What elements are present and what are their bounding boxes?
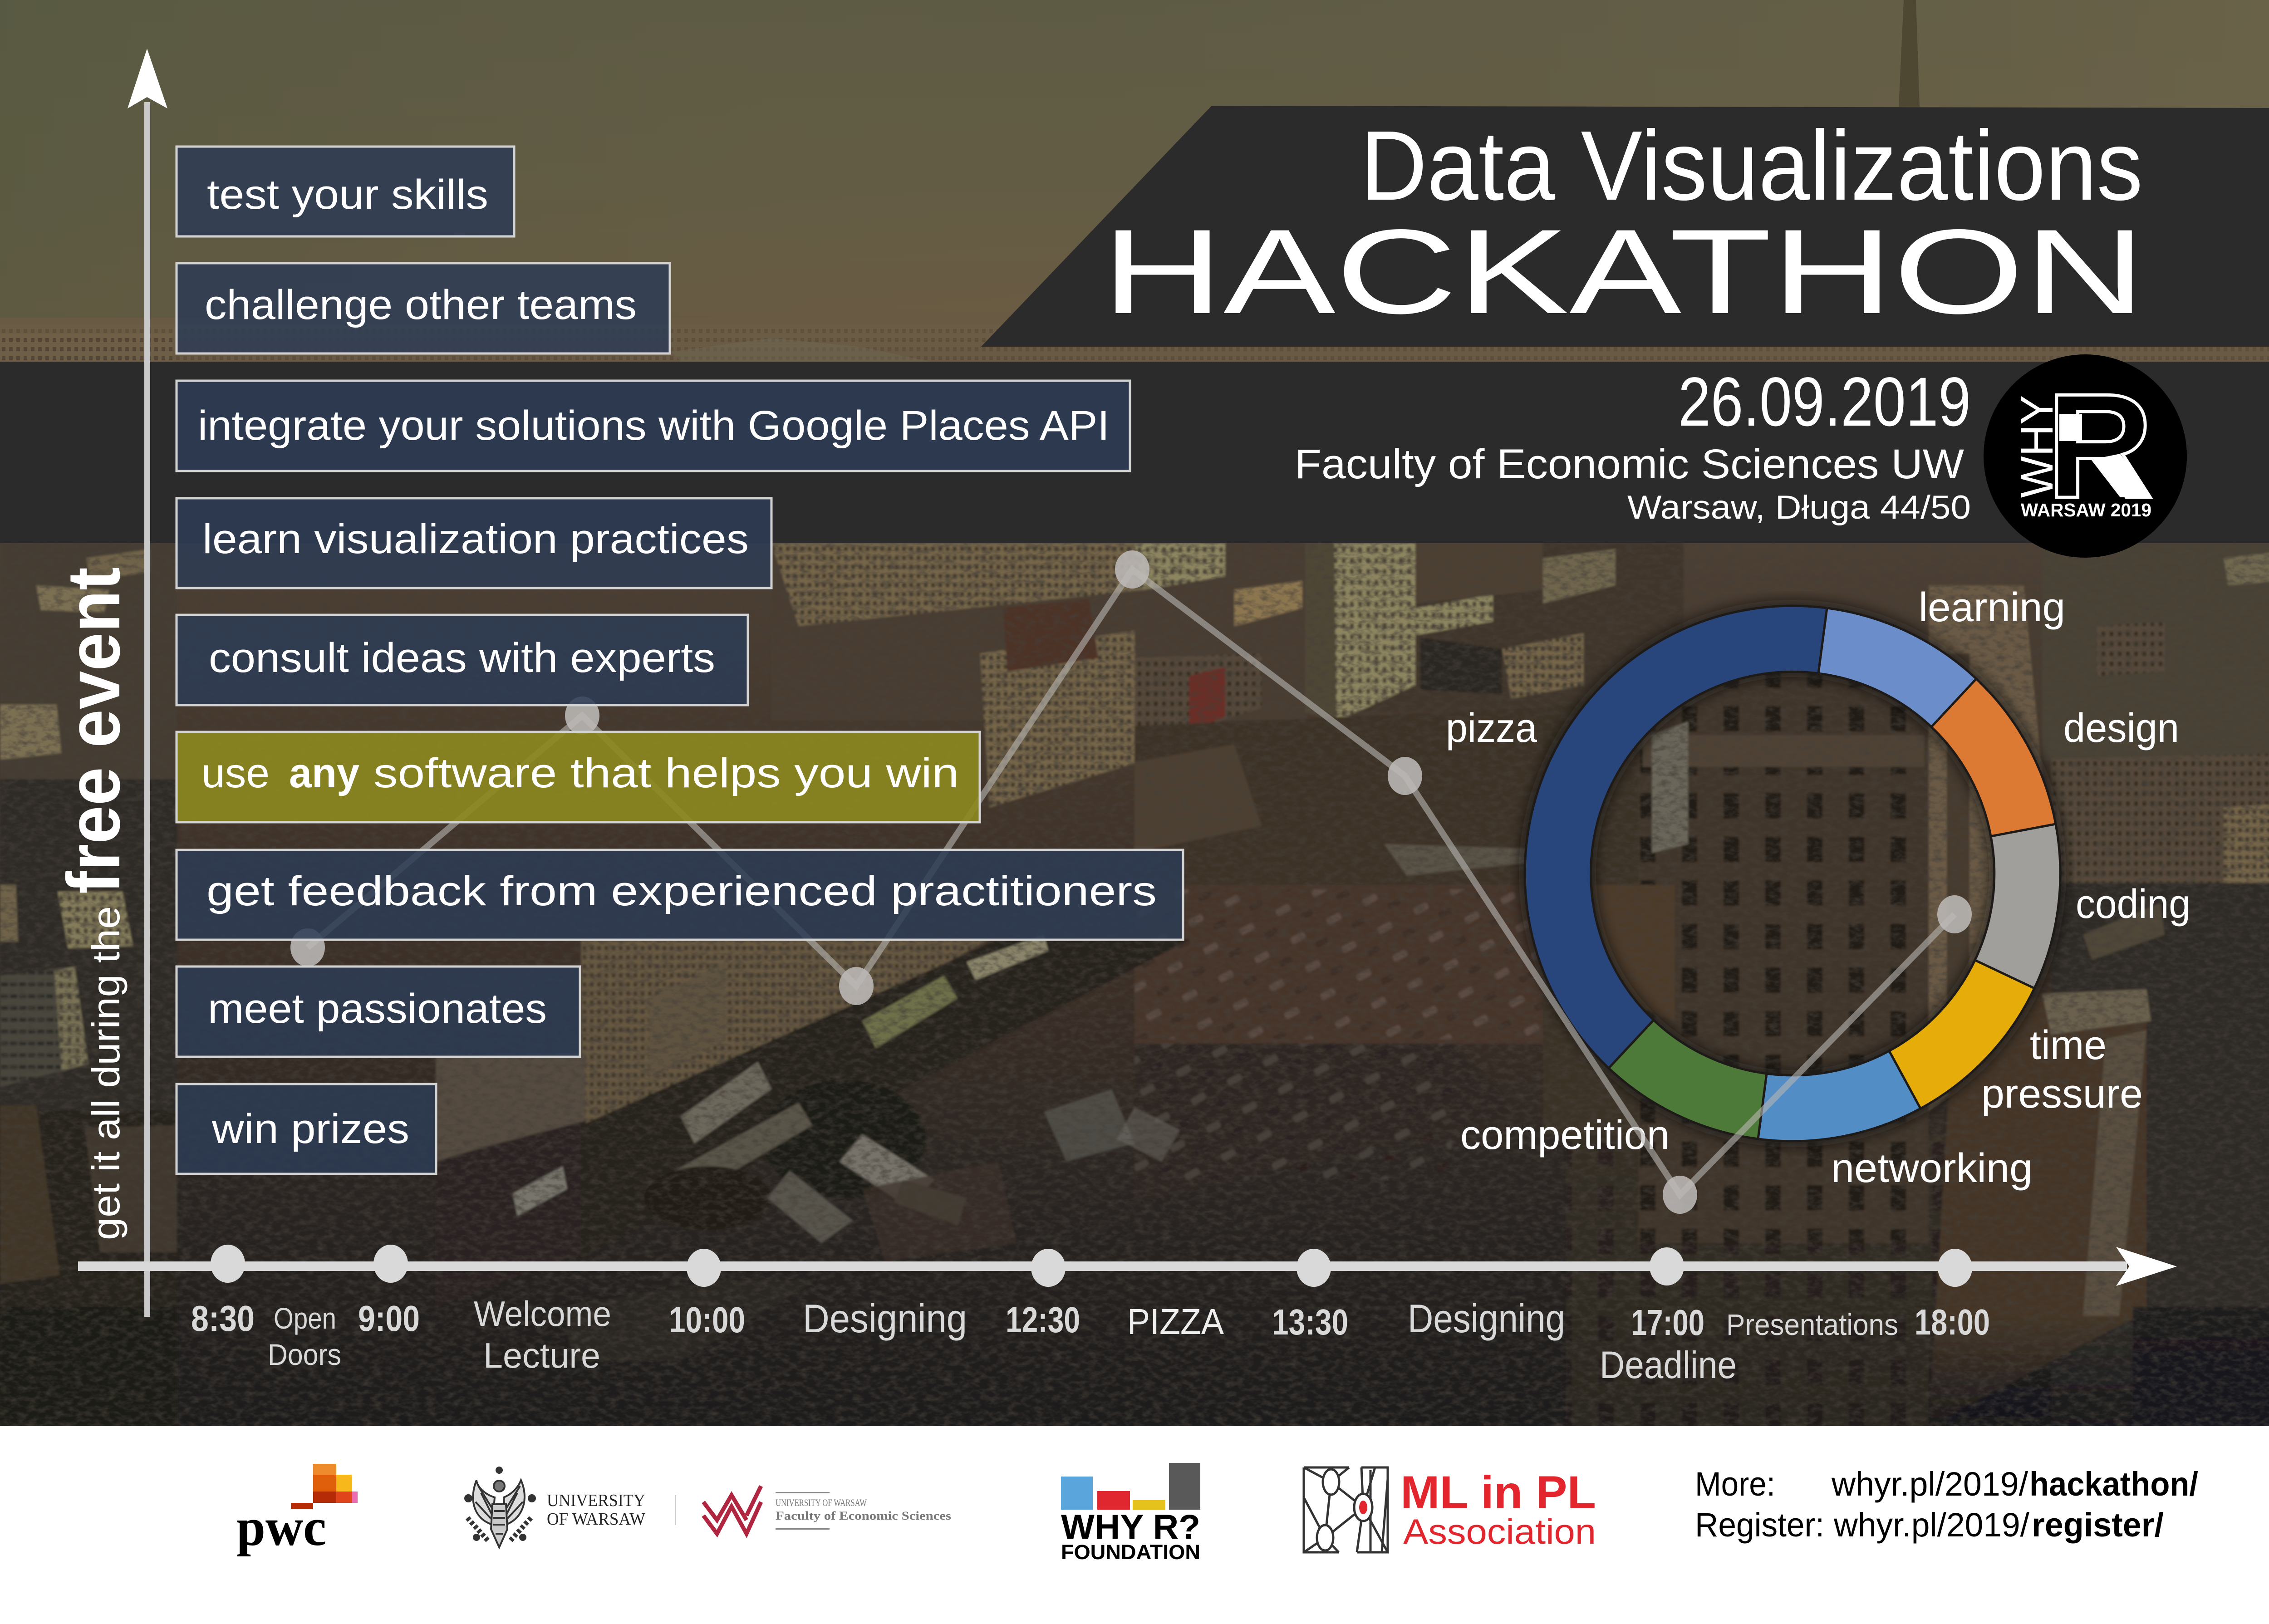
white footer	[0, 1426, 2269, 1624]
box: consult ideas with experts: consult ideas with experts	[209, 635, 715, 681]
box: test your skills: test your skills	[207, 172, 488, 218]
timeline labels: Designing	[1408, 1296, 1565, 1341]
donut labels: coding	[2076, 882, 2190, 927]
box: win prizes: win prizes	[211, 1106, 409, 1152]
box: meet passionates: meet passionates	[208, 986, 547, 1032]
box: use any software (highlighted)	[177, 732, 980, 822]
coaches parked on the square	[840, 1134, 935, 1207]
event date and venue: Faculty of Economic Sciences UW	[1295, 441, 1964, 487]
box: test your skills	[177, 147, 514, 236]
title: HACKATHON: HACKATHON	[1102, 205, 2146, 339]
event date and venue: 26.09.2019	[1678, 363, 1971, 441]
underpass and circular lawns	[762, 1080, 926, 1198]
timeline labels: Welcome	[474, 1294, 611, 1334]
logo: ML in PL Association: Association	[1403, 1511, 1596, 1551]
links: more and register: register/	[2032, 1506, 2164, 1544]
box: learn visualization practices: learn visualization practices	[202, 516, 749, 562]
rotated axis label	[52, 567, 135, 1240]
segment: networking	[1758, 1051, 1920, 1141]
timeline labels: Designing	[803, 1296, 967, 1341]
logo: ML in PL Association	[1304, 1467, 1596, 1552]
event date and venue	[1295, 363, 1971, 526]
central district blocks	[436, 543, 1684, 1361]
donut labels: learning	[1919, 585, 2065, 630]
logo: ML in PL Association: ML in PL	[1400, 1467, 1596, 1518]
segment: competition	[1609, 1020, 1767, 1139]
timeline axis with markers and arrow	[78, 1245, 2177, 1287]
timeline labels: Deadline	[1600, 1344, 1737, 1386]
dark title banner	[981, 106, 2269, 347]
logo: Why R? Foundation	[1061, 1463, 1200, 1564]
timeline labels: PIZZA	[1127, 1301, 1224, 1342]
logo: PwC	[236, 1464, 358, 1557]
segment: pizza	[1525, 606, 1827, 1068]
icon: eagle crest	[465, 1467, 535, 1547]
logo: Faculty of Economic Sciences: Faculty of Economic Sciences	[776, 1509, 951, 1522]
logo: University of Warsaw: UNIVERSITY	[547, 1491, 645, 1510]
title: Data Visualizations: Data Visualizations	[1360, 111, 2143, 221]
donut labels: pizza	[1446, 706, 1537, 751]
timeline labels: Presentations	[1726, 1308, 1898, 1341]
logo: Faculty of Economic Sciences: UNIVERSITY OF WARSAW	[776, 1497, 867, 1508]
horizon city strip	[0, 324, 2269, 362]
eastern district blocks	[1929, 543, 2269, 1426]
timeline labels: Open	[274, 1301, 336, 1335]
links: more and register	[1695, 1465, 2198, 1544]
logo: PwC: pwc	[236, 1497, 326, 1557]
logo: Why R? Foundation: FOUNDATION	[1061, 1541, 1200, 1564]
links: more and register: Register:	[1695, 1506, 1824, 1544]
logo separator	[675, 1495, 676, 1525]
logo: Why R? Warsaw 2019	[1984, 354, 2187, 558]
box: get feedback	[177, 850, 1183, 940]
line chart: excitement over the day	[290, 550, 1972, 1214]
rotated axis label: get it all during the	[85, 906, 128, 1240]
donut labels: networking	[1831, 1146, 2033, 1191]
Palace of Culture tower	[1543, 585, 2042, 1426]
timeline labels: Doors	[268, 1338, 341, 1371]
box: consult ideas with experts	[177, 615, 748, 705]
shopping mall and street	[581, 940, 989, 1125]
logo: University of Warsaw	[465, 1467, 645, 1547]
event date and venue: Warsaw, Długa 44/50	[1627, 489, 1971, 526]
donut labels	[1446, 585, 2190, 1191]
icon: ML in PL network	[1304, 1467, 1388, 1552]
logo: Why R? Warsaw 2019: R	[2047, 363, 2153, 529]
box: use any software (highlighted): software that helps you win	[373, 750, 959, 796]
timeline labels: Lecture	[483, 1335, 600, 1375]
box: integrate with Google Places API	[177, 381, 1130, 471]
segment: coding	[1975, 824, 2060, 988]
box: use any software (highlighted): use	[201, 750, 270, 796]
left district blocks	[0, 543, 177, 1426]
donut labels: time	[2030, 1023, 2107, 1068]
box: use any software (highlighted): any	[289, 750, 359, 796]
timeline labels: 13:30	[1272, 1302, 1348, 1342]
segment: time pressure	[1889, 960, 2034, 1109]
logo: Why R? Foundation: WHY R?	[1061, 1508, 1200, 1546]
box: challenge other teams	[177, 263, 670, 353]
links: more and register: whyr.pl/2019/	[1831, 1465, 2028, 1503]
donut labels: design	[2063, 706, 2179, 751]
radio mast on the horizon	[1899, 0, 1920, 107]
rotated axis label: free event	[52, 567, 135, 894]
donut chart: share of activities	[1525, 606, 2060, 1141]
box: win prizes	[177, 1084, 436, 1174]
timeline labels: 8:30	[191, 1298, 255, 1339]
timeline labels: 9:00	[358, 1298, 420, 1339]
box: meet passionates	[177, 967, 580, 1057]
donut labels: competition	[1460, 1113, 1670, 1158]
dark horizontal date band	[0, 362, 2269, 543]
links: more and register: More:	[1695, 1465, 1775, 1503]
plaza and car park ground	[1134, 708, 1552, 908]
hotel tower	[1305, 543, 1336, 721]
timeline labels	[191, 1294, 1990, 1386]
vertical axis with arrow	[128, 49, 167, 1317]
segment: learning	[1818, 608, 1976, 727]
timeline labels: 12:30	[1006, 1300, 1080, 1340]
logo: Faculty of Economic Sciences	[703, 1486, 951, 1534]
timeline labels: 18:00	[1915, 1302, 1990, 1342]
logo: Why R? Warsaw 2019: WHY	[2012, 395, 2063, 498]
timeline labels: 10:00	[669, 1300, 745, 1340]
box: challenge other teams: challenge other teams	[205, 282, 637, 328]
box: get feedback: get feedback from experienced practitioners	[206, 868, 1157, 914]
segment: design	[1931, 679, 2056, 836]
box: integrate with Google Places API: integrate your solutions with Google Places API	[198, 402, 1110, 449]
box: learn visualization practices	[177, 498, 771, 588]
links: more and register: hackathon/	[2029, 1465, 2198, 1503]
logo: University of Warsaw: OF WARSAW	[547, 1510, 645, 1529]
logo: Why R? Warsaw 2019: WARSAW 2019	[2021, 500, 2151, 520]
city blocks	[0, 543, 2269, 1426]
benefit boxes	[177, 147, 1183, 1174]
links: more and register: whyr.pl/2019/	[1833, 1506, 2029, 1544]
timeline labels: 17:00	[1631, 1302, 1704, 1343]
donut labels: pressure	[1981, 1071, 2143, 1117]
